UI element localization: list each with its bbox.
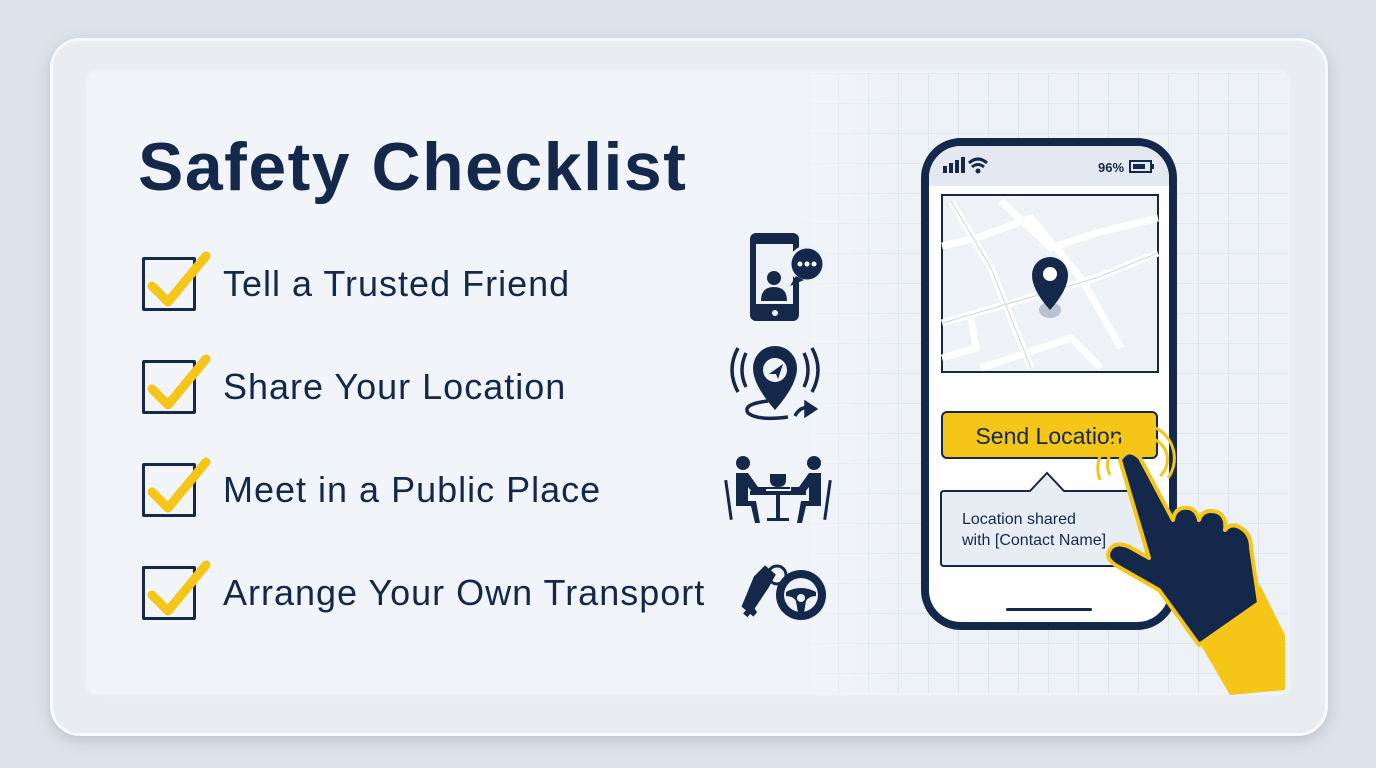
icon: phone chat	[750, 233, 824, 321]
item: tell a trusted friend	[142, 252, 570, 311]
item: share your location: Share Your Location	[223, 366, 566, 407]
status bar: 96%	[1098, 160, 1124, 175]
icons column	[724, 233, 832, 620]
item: meet in a public place	[142, 458, 601, 517]
title: Safety Checklist	[138, 129, 687, 205]
item: arrange your own transport: Arrange Your Own Transport	[223, 572, 705, 613]
bubble	[941, 473, 1157, 566]
phone mockup	[921, 138, 1177, 630]
status bar	[943, 157, 1154, 175]
hand pointer	[1096, 426, 1285, 695]
item: meet in a public place: Meet in a Public Place	[223, 469, 601, 510]
item: arrange your own transport	[142, 560, 705, 620]
phone mockup: Send Location	[975, 423, 1123, 449]
icon: meeting	[724, 456, 832, 523]
item: share your location	[142, 354, 566, 414]
icon: location share	[732, 346, 818, 418]
send button	[942, 412, 1157, 458]
phone mockup: Location shared	[962, 511, 1076, 528]
phone mockup: with [Contact Name]	[961, 532, 1106, 549]
icon: key and wheel	[738, 565, 826, 620]
map	[942, 195, 1158, 372]
item: tell a trusted friend: Tell a Trusted Friend	[223, 263, 570, 304]
